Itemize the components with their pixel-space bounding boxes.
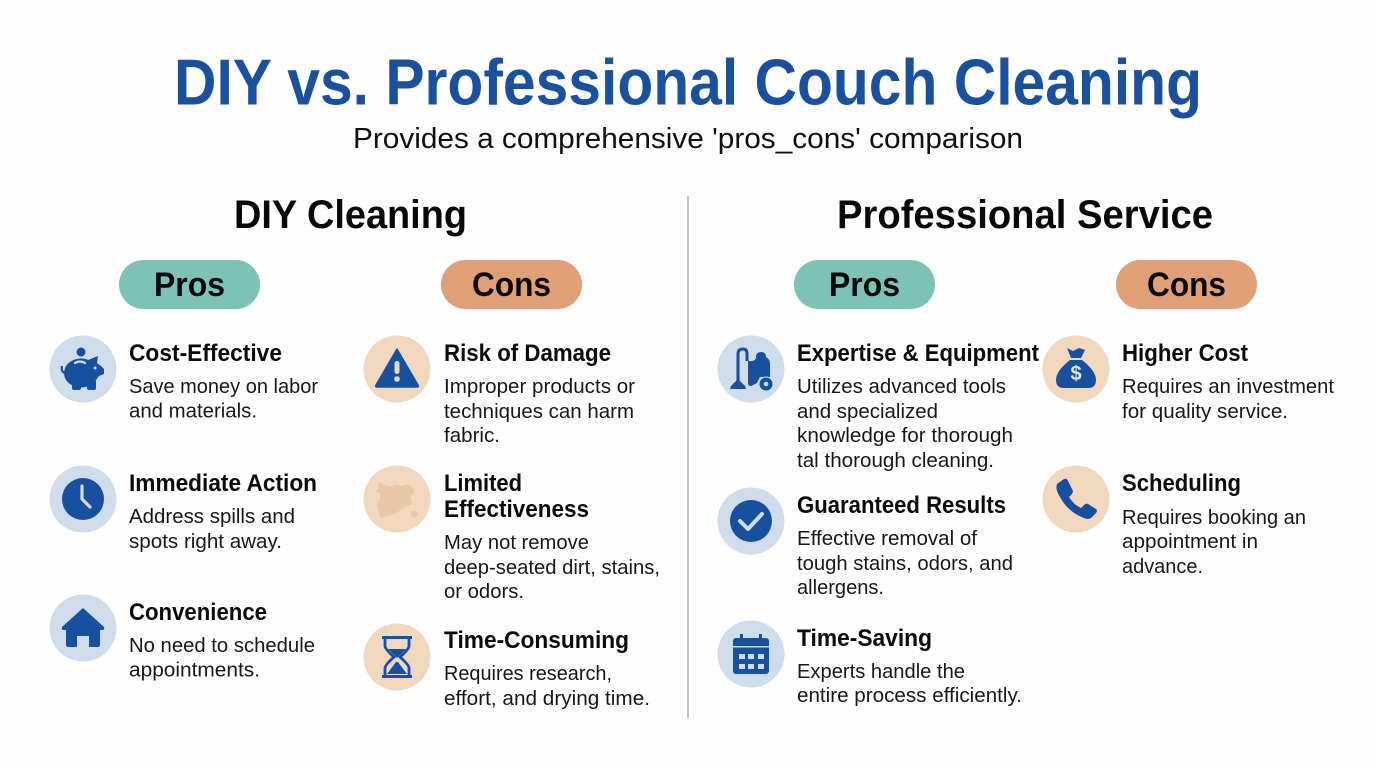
item: Cost-Effective: and materials. xyxy=(129,400,257,422)
item: Time-Saving: Experts handle the xyxy=(797,660,965,683)
icon: stain xyxy=(364,466,430,532)
item: Immediate Action: Address spills and xyxy=(129,505,295,528)
item: Limited Effectiveness: deep-seated dirt, stains, xyxy=(444,556,660,579)
item: Immediate Action: spots right away. xyxy=(129,530,282,553)
item: Guaranteed Results: allergens. xyxy=(797,576,884,599)
item: Risk of Damage: fabric. xyxy=(444,424,500,447)
icon: piggy bank xyxy=(50,336,116,402)
pill: DIY pros: Pros xyxy=(154,266,225,304)
icon: money bag: $ xyxy=(1070,363,1082,385)
icon: hourglass xyxy=(364,624,430,690)
icon: money bag xyxy=(1042,336,1110,402)
item: Expertise & Equipment: Expertise & Equipment xyxy=(797,340,1039,367)
item: Guaranteed Results xyxy=(718,488,1013,599)
item: Limited Effectiveness: May not remove xyxy=(444,531,589,554)
item: Scheduling: Requires booking an xyxy=(1122,506,1306,529)
item: Higher Cost: Requires an investment xyxy=(1122,375,1334,398)
panel: DIY cleaning xyxy=(50,193,660,710)
icon: house xyxy=(50,594,116,662)
item: Scheduling: advance. xyxy=(1122,555,1203,578)
subtitle: Provides a comprehensive 'pros_cons' comparison xyxy=(353,123,1023,155)
item: Time-Consuming: Time-Consuming xyxy=(444,627,629,654)
pill: DIY pros xyxy=(119,260,260,309)
item: Cost-Effective: Cost-Effective xyxy=(129,340,282,367)
item: Higher Cost xyxy=(1042,336,1334,423)
item: Time-Saving: entire process efficiently. xyxy=(797,684,1022,707)
item: Cost-Effective: Save money on labor xyxy=(129,375,318,398)
item: Time-Saving xyxy=(718,620,1022,707)
pill: professional cons xyxy=(1116,260,1257,309)
icon: check mark xyxy=(718,488,784,554)
item: Expertise & Equipment: tal thorough cleaning. xyxy=(797,449,994,472)
pill: DIY cons: Cons xyxy=(472,266,551,304)
item: Time-Consuming: Requires research, xyxy=(444,662,612,685)
item: Expertise & Equipment: Utilizes advanced tools xyxy=(797,375,1006,398)
icon: warning triangle xyxy=(364,336,430,402)
pill: professional pros xyxy=(794,260,935,309)
item: Higher Cost: Higher Cost xyxy=(1122,340,1248,367)
item: Limited Effectiveness: or odors. xyxy=(444,580,524,603)
item: Convenience xyxy=(50,594,315,682)
item: Expertise & Equipment: knowledge for thorough xyxy=(797,424,1013,447)
icon: phone xyxy=(1042,466,1110,532)
item: Convenience: appointments. xyxy=(129,658,260,682)
item: Higher Cost: for quality service. xyxy=(1122,400,1288,423)
item: Time-Consuming xyxy=(364,624,650,710)
item: Scheduling: Scheduling xyxy=(1122,470,1241,497)
item: Expertise & Equipment: and specialized xyxy=(797,400,938,423)
pill: DIY cons xyxy=(441,260,582,309)
item: Limited Effectiveness: Effectiveness xyxy=(444,496,589,523)
item: Time-Consuming: effort, and drying time. xyxy=(444,687,650,710)
title: DIY vs. Professional Couch Cleaning xyxy=(174,46,1202,118)
item: Guaranteed Results: Effective removal of xyxy=(797,527,977,550)
pill: professional pros: Pros xyxy=(829,266,900,304)
item: Guaranteed Results: tough stains, odors, and xyxy=(797,552,1013,575)
item: Immediate Action: Immediate Action xyxy=(129,470,317,497)
item: Scheduling: appointment in xyxy=(1122,530,1258,553)
item: Guaranteed Results: Guaranteed Results xyxy=(797,492,1006,519)
item: Risk of Damage: techniques can harm xyxy=(444,400,634,423)
item: Scheduling xyxy=(1042,466,1306,578)
heading: Professional Service: Professional Service xyxy=(837,193,1213,237)
item: Time-Saving: Time-Saving xyxy=(797,625,932,652)
item: Expertise & Equipment xyxy=(718,336,1039,472)
item: Risk of Damage: Improper products or xyxy=(444,375,635,398)
item: Convenience: Convenience xyxy=(129,599,267,626)
item: Immediate Action xyxy=(50,466,317,553)
item: Risk of Damage xyxy=(364,336,635,447)
icon: calendar xyxy=(718,620,784,688)
pill: professional cons: Cons xyxy=(1147,266,1226,304)
item: Risk of Damage: Risk of Damage xyxy=(444,340,611,367)
icon: vacuum cleaner xyxy=(718,336,784,402)
item: Convenience: No need to schedule xyxy=(129,634,315,657)
item: Limited Effectiveness: Limited xyxy=(444,470,522,497)
icon: clock xyxy=(50,466,116,532)
item: Cost-Effective xyxy=(50,336,318,422)
heading: DIY Cleaning: DIY Cleaning xyxy=(234,193,467,237)
panel: professional service xyxy=(718,193,1334,707)
item: Limited Effectiveness xyxy=(364,466,660,603)
